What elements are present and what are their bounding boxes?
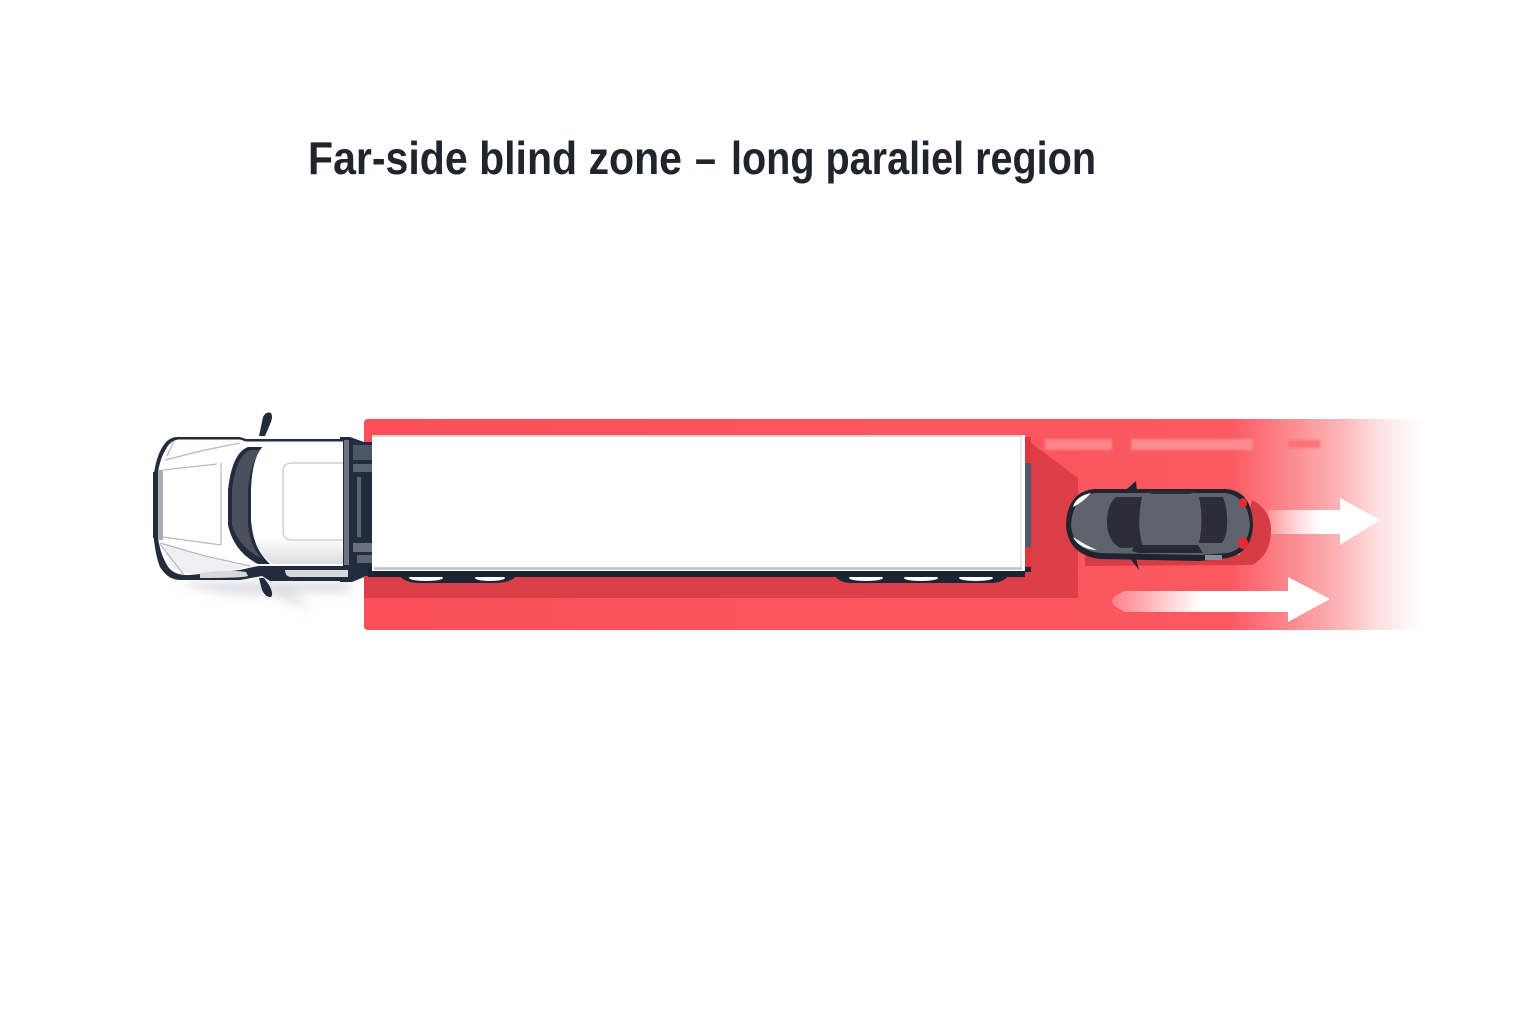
cab roof [251,442,343,564]
title: Far-side blind zone [308,132,682,184]
side handle [1205,555,1222,560]
car shadow [1085,500,1271,566]
top strip [1145,491,1198,494]
wheels [398,574,1010,583]
trailer [368,435,1031,583]
mirror top [259,412,272,436]
chassis rail [368,568,1025,577]
front windshield [1107,497,1143,548]
box [372,435,1025,571]
headlights [1073,493,1091,507]
car body paint [1071,493,1250,555]
car mirrors [1127,481,1137,491]
motion arrow: upper [1268,498,1380,545]
truck [153,412,373,610]
cast shadow of truck [364,435,1078,598]
car [1066,481,1271,570]
hood lines [160,441,250,575]
cab chassis behind [340,437,364,582]
cab ground shadow [180,582,350,610]
title [308,132,1096,184]
mirror bottom [259,578,272,597]
front bumper [153,472,158,538]
motion arrow: lower [1112,577,1330,622]
lane dashes [1045,439,1320,450]
title: – [695,132,716,184]
lower hood shading [162,542,250,574]
tail lights [1239,498,1247,508]
rear doors [1024,437,1031,567]
title: long paraliel region [731,132,1096,184]
car body outline [1066,489,1253,561]
door strip [1132,545,1203,553]
roof panel outline [283,463,343,540]
windshield [228,447,270,564]
rear window [1199,497,1227,543]
cab body [153,437,351,581]
step fairings [200,571,248,578]
red blind zone [364,419,1425,630]
